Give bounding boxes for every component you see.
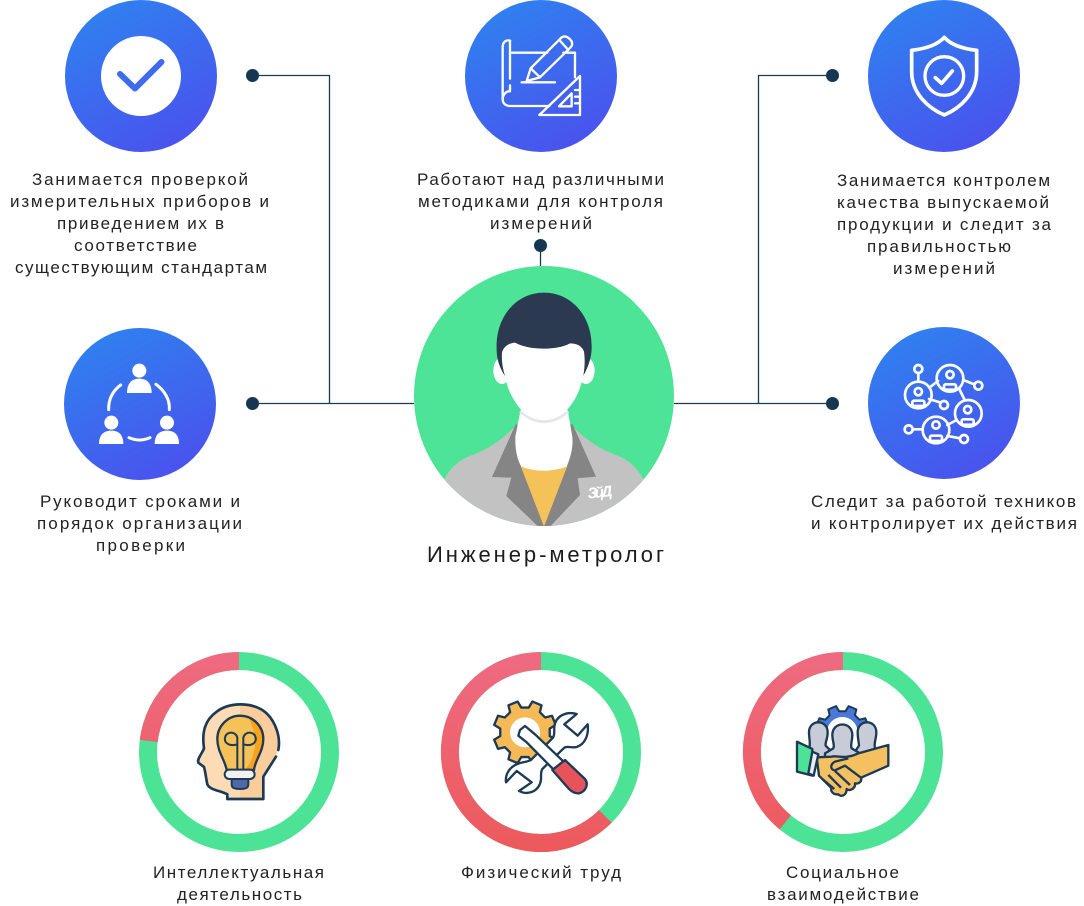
label: intellectual activity: Интеллектуальная [153,863,324,882]
portrait: metrology engineer [414,266,674,533]
text: instrument verification: Занимается проверкой [32,170,248,189]
text: measurement methods: Работают над различными [417,170,664,189]
text: quality control: правильностью [867,237,1011,256]
label: social interaction: взаимодействие [767,885,919,904]
text: instrument verification: измерительных приборов и [10,192,269,211]
text: measurement methods: измерений [490,214,592,233]
label: intellectual activity: деятельность [177,885,302,904]
text: quality control: Занимается контролем [837,171,1050,190]
label: physical labour: Физический труд [461,863,621,882]
text: measurement methods: методиками для контроля [418,192,663,211]
text: quality control: измерений [893,259,995,278]
text: deadlines: проверки [96,536,185,555]
icon: team and handshake [797,706,888,796]
icon: head with light bulb [198,704,279,799]
donut: intellectual activity [148,661,330,843]
text: quality control: продукции и следит за [837,215,1052,234]
label: intellectual activity [153,863,324,904]
icon: check mark in blue circle [65,0,217,152]
text: deadlines: Руководит сроками и [40,492,240,511]
text: supervising technicians [811,492,1077,533]
text: quality control [837,171,1052,278]
donut: social interaction [752,661,934,843]
title: job name: Инженер-метролог [427,542,664,567]
text: measurement methods [417,170,664,233]
icon: shield with check in blue circle [868,0,1020,152]
text: quality control: качества выпускаемой [837,193,1049,212]
jacket logo: ЗйД [587,483,613,503]
text: supervising technicians: Следит за работой техников [811,492,1076,511]
text: deadlines: порядок организации [37,514,242,533]
text: instrument verification: соответствие [74,236,197,255]
icon: people network in blue circle [868,327,1020,479]
jacket [443,423,645,533]
text: instrument verification: приведением их в [57,214,224,233]
label: social interaction [767,863,919,904]
text: instrument verification: существующим стандартам [15,258,267,277]
icon: gear, wrench and screwdriver [494,702,588,793]
icon: blueprint with pencil in blue circle [465,0,617,152]
text: deadlines [37,492,242,555]
label: social interaction: Социальное [786,863,899,882]
connector lines and dots [246,69,839,410]
icon: three people in blue circle [64,328,216,480]
donut: physical labour [450,661,632,843]
text: instrument verification [10,170,269,277]
text: supervising technicians: и контролирует их действия [811,514,1077,533]
